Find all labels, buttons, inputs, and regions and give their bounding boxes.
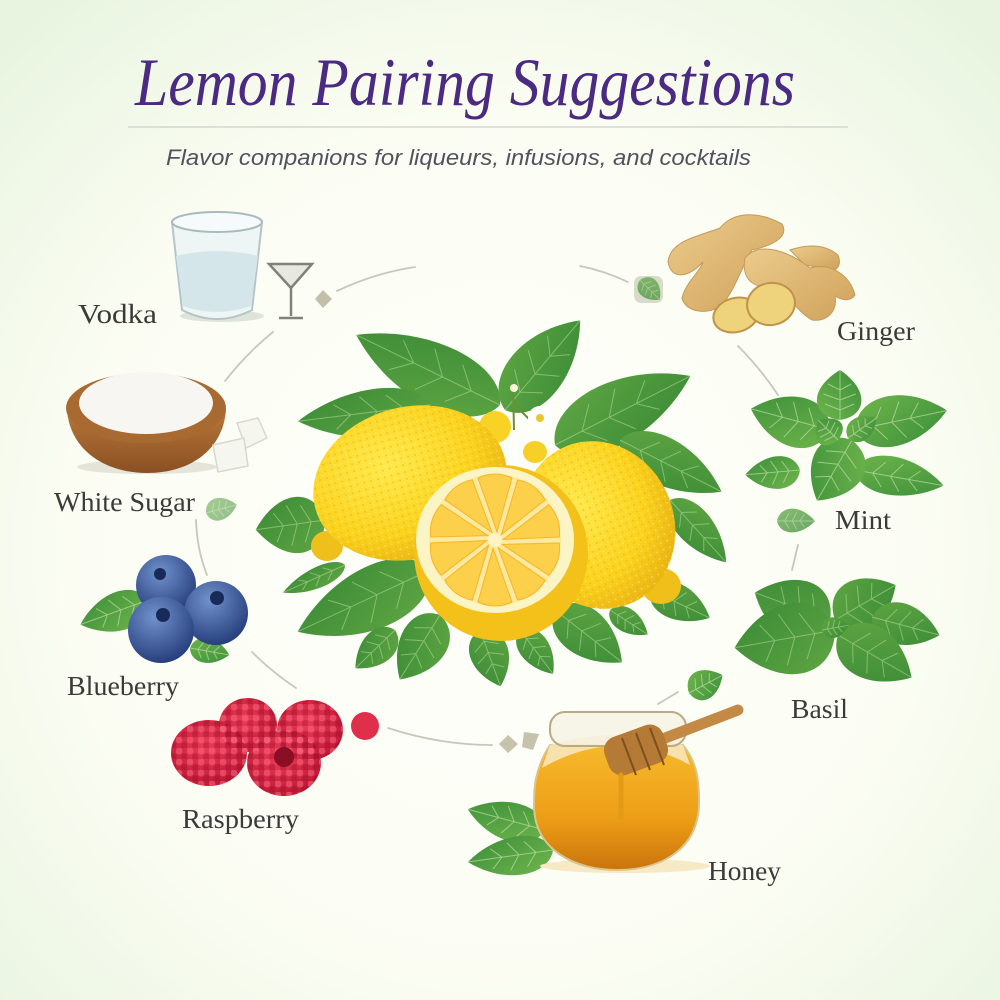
icon: honey leaves: [463, 791, 556, 882]
left lemon: [296, 384, 524, 582]
title: Lemon Pairing Suggestions: [134, 44, 795, 120]
label: White Sugar: White Sugar: [54, 487, 195, 517]
icon: sugar bowl: [66, 372, 226, 474]
icon: vodka glass: [172, 212, 264, 322]
icon: honey dipper: [600, 710, 738, 818]
icon: leaf: [633, 272, 667, 307]
label: Mint: Mint: [835, 505, 892, 535]
central lemon cluster: [252, 302, 740, 693]
icon: raspberry slice: [351, 712, 379, 740]
label: Ginger: Ginger: [837, 316, 915, 346]
icon: basil leaves: [729, 562, 945, 700]
item: ginger: [633, 215, 915, 346]
leaves behind lemons: [252, 302, 740, 693]
icons: small diamonds: [499, 732, 539, 753]
item: vodka: [78, 212, 332, 329]
connector arcs: [196, 266, 798, 745]
icon: raspberries: [171, 698, 343, 796]
icon: leaf: [203, 493, 240, 523]
icon: martini glass: [269, 264, 312, 318]
right lemon: [496, 418, 700, 632]
icon: honey jar: [534, 712, 710, 873]
item: blueberry: [67, 555, 248, 701]
label: Honey: Honey: [708, 856, 782, 886]
item: white sugar: [54, 372, 267, 523]
item: mint: [744, 370, 952, 535]
icon: blueberries: [128, 555, 248, 663]
label: Basil: Basil: [791, 694, 848, 724]
item: raspberry: [171, 698, 539, 834]
icon: diamond: [315, 290, 332, 308]
icon: blueberry leaves: [74, 583, 232, 667]
icon: leaf: [777, 509, 815, 532]
label: Vodka: Vodka: [78, 299, 157, 329]
cut lemon: [414, 465, 588, 641]
icon: sugar cubes: [213, 418, 267, 472]
icon: leaf: [682, 662, 729, 706]
label: Raspberry: Raspberry: [182, 804, 300, 834]
item: honey: [463, 710, 782, 886]
label: Blueberry: Blueberry: [67, 671, 180, 701]
subtitle: Flavor companions for liqueurs, infusions, and cocktails: [166, 145, 751, 170]
icon: mint leaves: [744, 370, 952, 514]
icon: ginger root: [668, 215, 855, 337]
blossom: [510, 384, 552, 430]
item: basil: [682, 562, 945, 724]
